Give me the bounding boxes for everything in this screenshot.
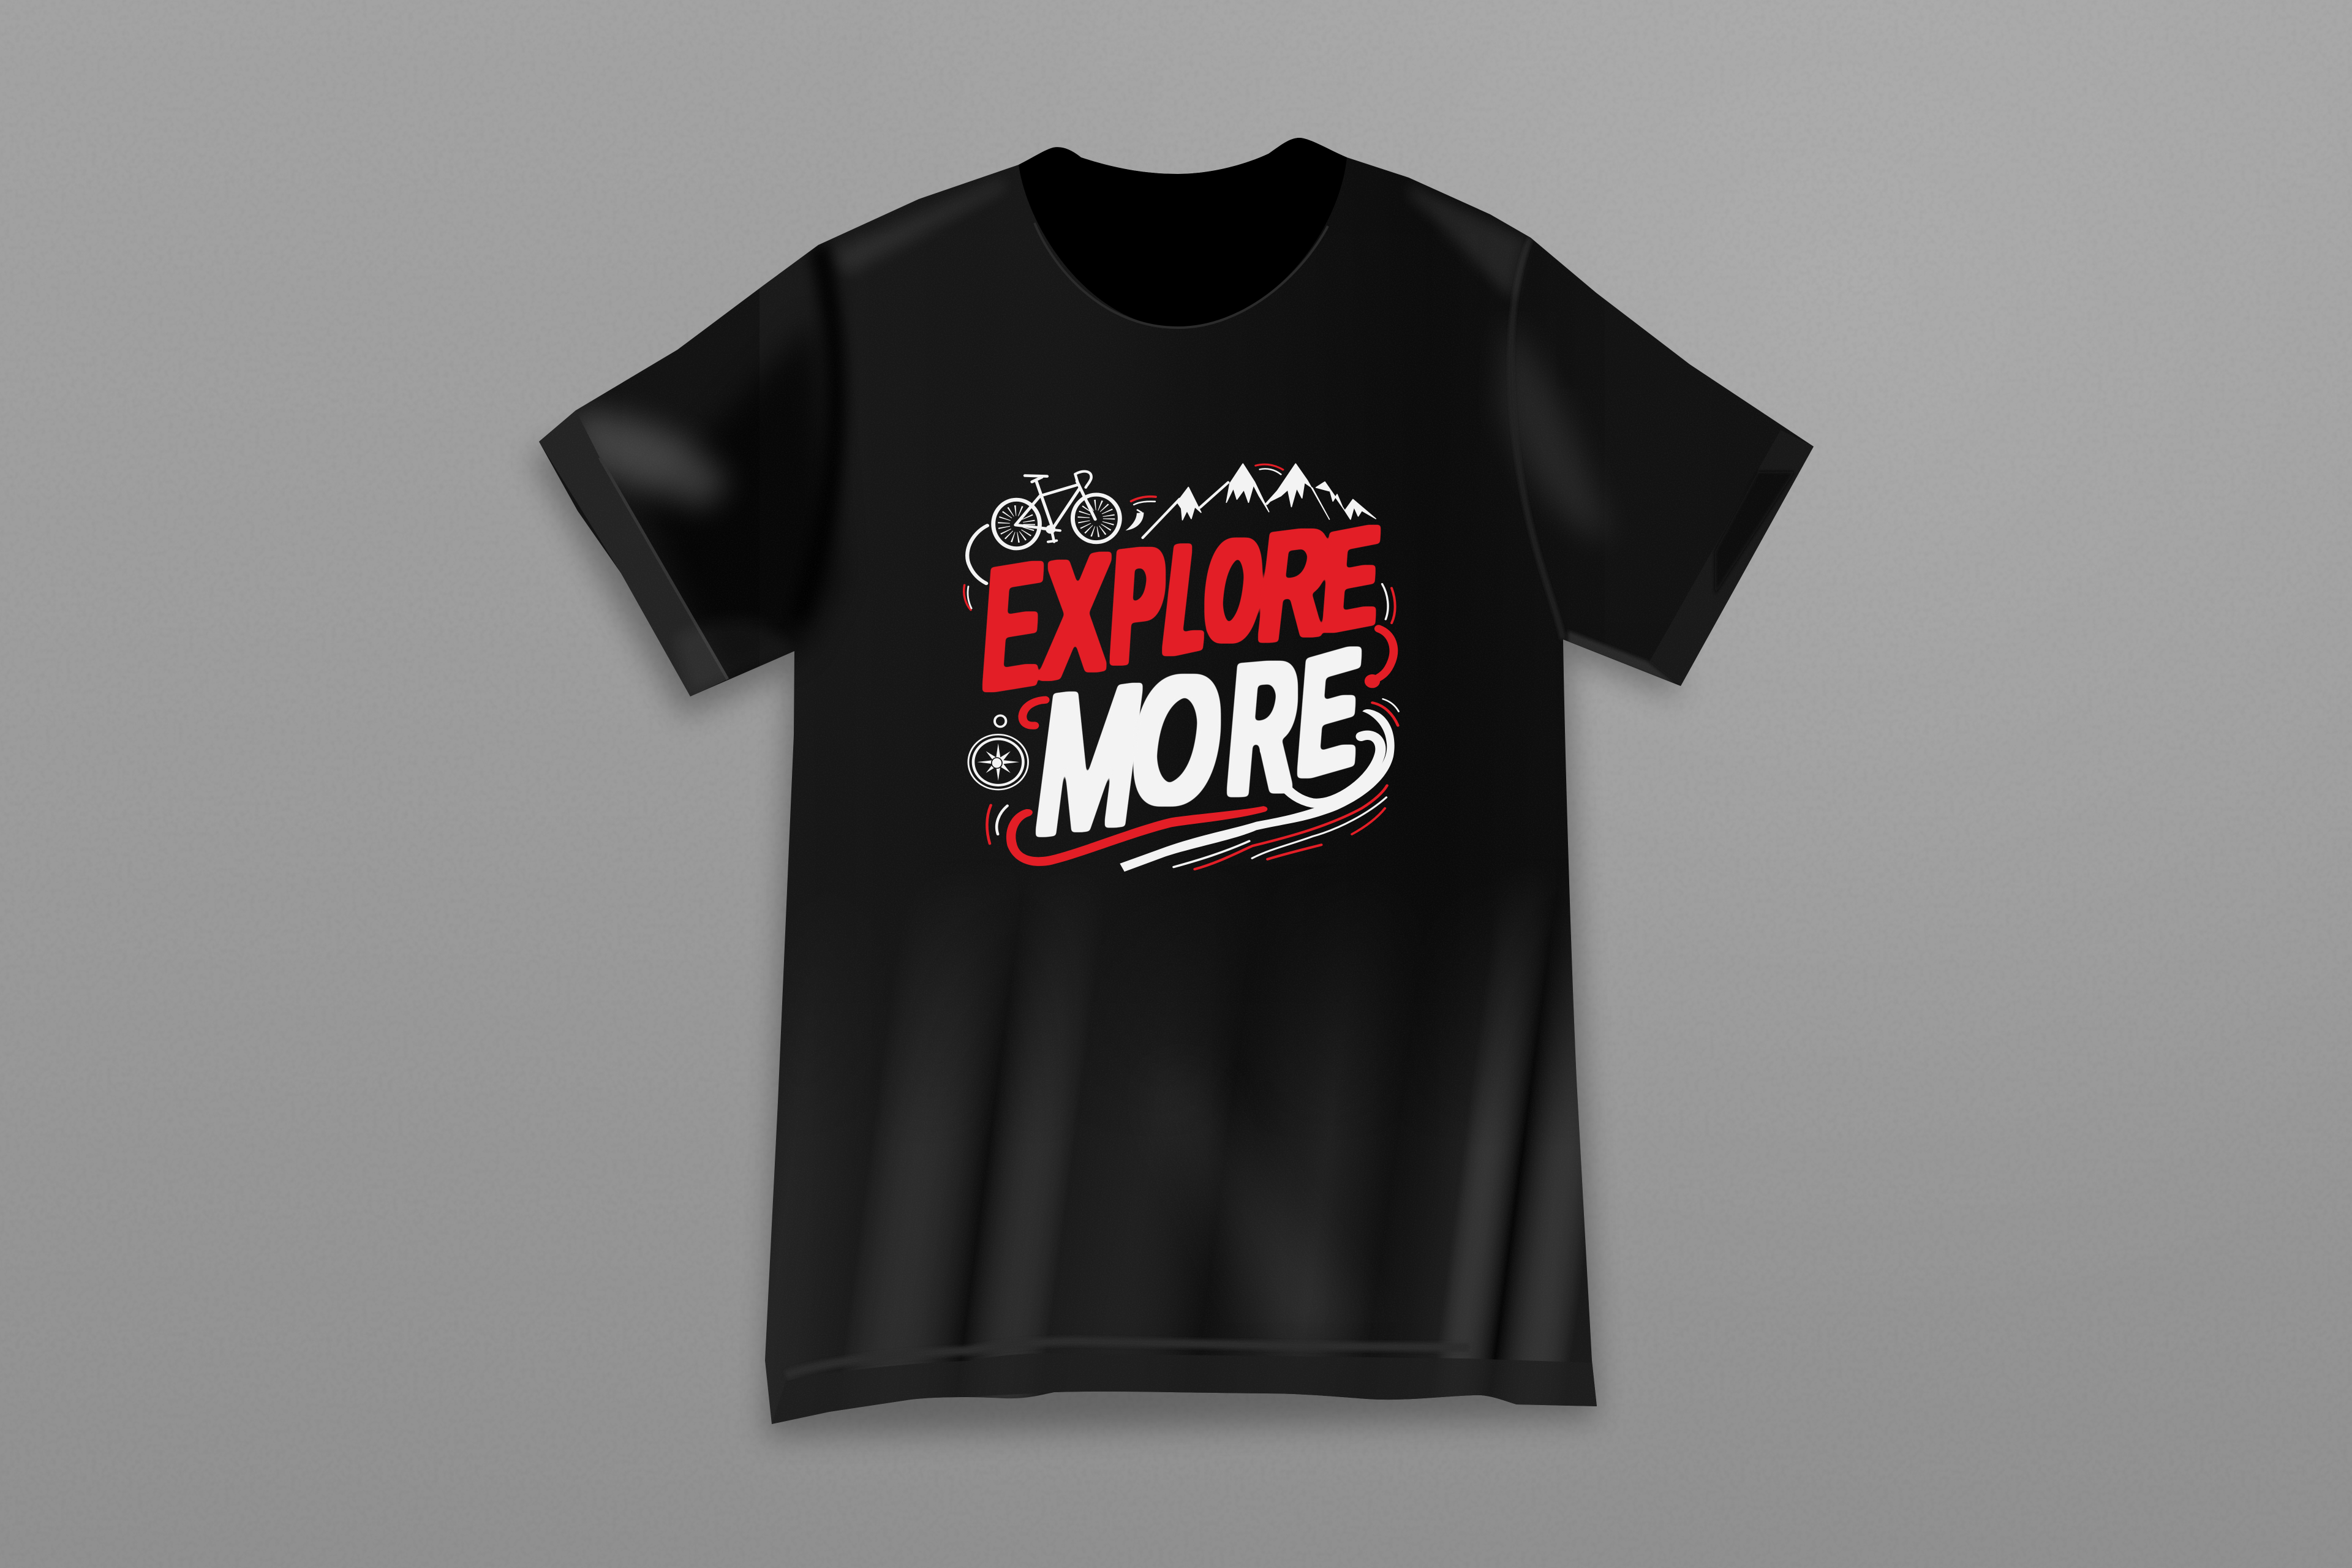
inner collar	[1019, 138, 1347, 328]
swash: lower speed lines	[987, 785, 1387, 869]
left sleeve shading	[539, 245, 839, 696]
hem band	[772, 1353, 1597, 1424]
t-shirt	[490, 123, 1838, 1439]
wordmark: EXPLORE: P	[1107, 515, 1167, 696]
wordmark: MORE: M	[1026, 643, 1153, 876]
wordmark: MORE: O	[1124, 639, 1230, 842]
icon: compass	[968, 715, 1028, 790]
swash: red underline	[1006, 806, 1267, 866]
swash: right of wordmark	[1365, 584, 1399, 725]
wordmark: EXPLORE: L	[1159, 511, 1214, 685]
print artwork	[964, 464, 1399, 876]
swash: white ribbon	[1120, 709, 1395, 872]
wordmark: EXPLORE	[979, 498, 1382, 725]
wordmark: EXPLORE: O	[1200, 511, 1266, 671]
wordmark: EXPLORE: E	[979, 528, 1046, 725]
wordmark: MORE	[1026, 614, 1363, 876]
icon: mountains	[1143, 464, 1376, 538]
fabric folds and shading	[490, 123, 1838, 1439]
wordmark: EXPLORE: R	[1253, 498, 1335, 671]
wordmark: EXPLORE: X	[1041, 521, 1111, 712]
shirt body silhouette	[539, 138, 1814, 1424]
chest shading	[1347, 157, 1547, 1400]
swoosh: next to bicycle	[1126, 497, 1156, 530]
shoulder highlights	[1411, 189, 1524, 293]
right sleeve shading	[1501, 238, 1814, 686]
wordmark: EXPLORE: E	[1320, 499, 1382, 658]
icon: bicycle	[993, 472, 1120, 548]
fabric grain	[490, 123, 1838, 1439]
wordmark: MORE: R	[1223, 624, 1303, 832]
collar rim	[1035, 223, 1328, 328]
shirt shadow on backdrop	[530, 368, 1681, 1436]
wordmark: MORE: E	[1294, 614, 1363, 810]
swash: red hook by M	[1022, 700, 1046, 726]
swash: left of wordmark	[964, 526, 987, 610]
swash: R tail curl	[1265, 735, 1381, 803]
lower body folds	[735, 858, 1623, 1439]
